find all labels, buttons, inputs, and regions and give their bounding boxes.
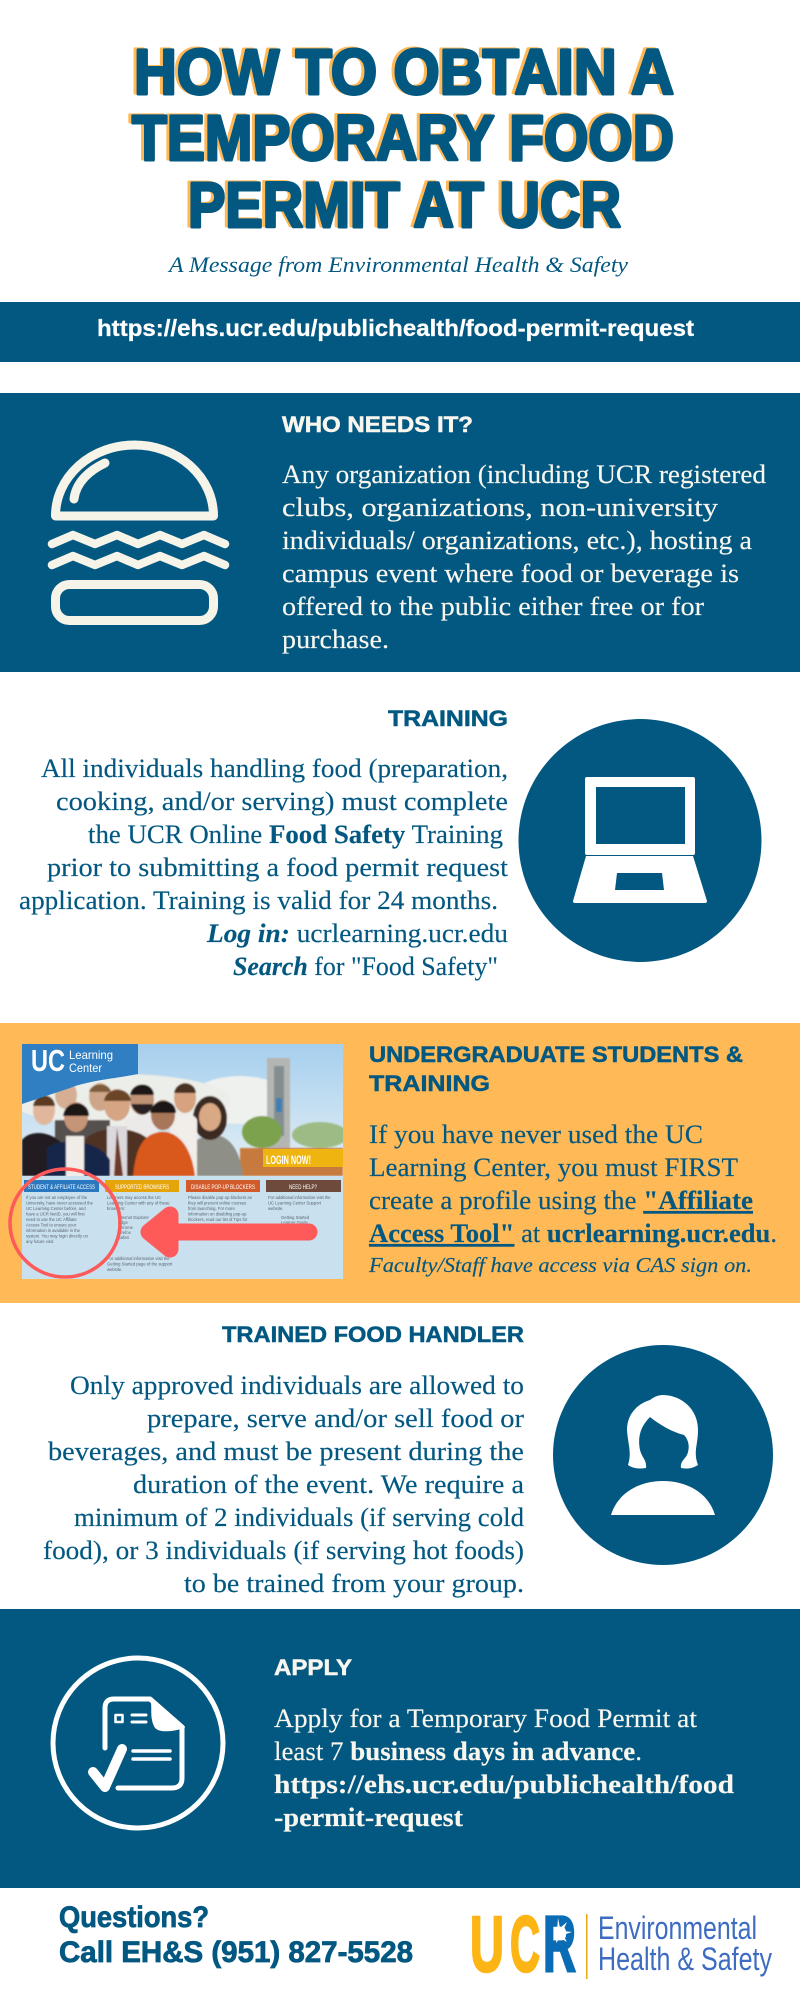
logo: UCR Environmental Health & Safety <box>470 1899 772 1988</box>
logo: UCR Environmental Health & Safety: U <box>470 1899 504 1988</box>
text block: beverages, and must be present during the <box>48 1437 524 1466</box>
screenshot: UC Learning Center: information on disabling pop-up <box>188 1212 247 1216</box>
title: PERMIT AT UCR <box>185 168 618 240</box>
screenshot: UC Learning Center: Center <box>69 1061 102 1075</box>
screenshot: UC Learning Center: University, have never accessed the <box>26 1200 94 1206</box>
screenshot: UC Learning Center: UC Learning Center before, and <box>26 1206 86 1211</box>
title <box>129 35 674 241</box>
screenshot: UC Learning Center: website. <box>107 1267 122 1272</box>
text block: purchase. <box>282 625 389 654</box>
panel: undergraduate students <box>0 1023 800 1303</box>
screenshot: UC Learning Center: any future visit. <box>26 1239 54 1244</box>
screenshot: UC Learning Center: blockers, read our list of Tips for <box>188 1217 248 1222</box>
text block: the UCR Online Food Safety Training <box>88 820 503 849</box>
screenshot: UC Learning Center: LOGIN NOW! <box>266 1153 311 1167</box>
screenshot: UC Learning Center: Access Tool to ensure your <box>26 1222 77 1228</box>
panel: who needs it <box>0 393 800 672</box>
screenshot: UC Learning Center: UC <box>31 1043 65 1078</box>
screenshot: UC Learning Center: SUPPORTED BROWSERS <box>115 1185 169 1191</box>
text block: application. Training is valid for 24 months. <box>19 886 498 915</box>
footer contact text: Questions? <box>59 1901 209 1934</box>
icon: burger <box>52 445 225 620</box>
screenshot: UC Learning Center: NEED HELP? <box>289 1185 317 1191</box>
screenshot: UC Learning Center: Internet Explorer <box>118 1215 150 1220</box>
icon: person <box>553 1345 773 1565</box>
logo: UCR Environmental Health & Safety: Environmental <box>598 1910 757 1946</box>
text block: All individuals handling food (preparation, <box>41 754 508 783</box>
text block: https://ehs.ucr.edu/publichealth/food <box>274 1770 735 1799</box>
screenshot: UC Learning Center: browsers: <box>107 1206 125 1211</box>
title: HOW TO OBTAIN A <box>134 36 674 108</box>
screenshot: UC Learning Center: Learners may access the UC <box>107 1195 161 1200</box>
heading: TRAINED FOOD HANDLER <box>222 1322 524 1347</box>
text block: prepare, serve and/or sell food or <box>147 1404 524 1433</box>
panel: apply <box>0 1609 800 1888</box>
screenshot: UC Learning Center: If you are not an employee of the <box>26 1195 88 1200</box>
screenshot: UC Learning Center: DISABLE POP-UP BLOCKERS <box>191 1185 255 1191</box>
text block <box>274 1704 735 1832</box>
text block <box>43 1371 524 1598</box>
screenshot: UC Learning Center: UC Learning Center Support <box>268 1200 322 1206</box>
text block: Faculty/Staff have access via CAS sign on. <box>368 1253 752 1277</box>
text block: Log in: ucrlearning.ucr.edu <box>206 919 508 948</box>
heading: WHO NEEDS IT? <box>282 412 473 437</box>
icon: laptop <box>518 719 762 962</box>
screenshot: UC Learning Center: Please disable pop-up blockers as <box>188 1195 252 1200</box>
text block: Only approved individuals are allowed to <box>70 1371 524 1400</box>
text block: cooking, and/or serving) must complete <box>56 787 508 816</box>
text block <box>282 460 766 654</box>
screenshot: UC Learning Center: Getting Started page of the support <box>107 1262 173 1266</box>
text block: Apply for a Temporary Food Permit at <box>274 1704 698 1733</box>
screenshot: UC Learning Center: For additional information visit the <box>107 1256 170 1261</box>
screenshot: UC Learning Center: Getting Started <box>281 1215 310 1220</box>
text block: Any organization (including UCR registered <box>282 460 766 489</box>
text block: least 7 business days in advance . <box>274 1737 642 1766</box>
screenshot: UC Learning Center: from launching. For more <box>188 1206 235 1211</box>
text block: campus event where food or beverage is <box>282 559 739 588</box>
heading: APPLY <box>274 1655 352 1680</box>
screenshot: UC Learning Center: they will prevent online courses <box>188 1200 246 1206</box>
text block: food), or 3 individuals (if serving hot foods) <box>43 1536 524 1565</box>
screenshot: UC Learning Center: Learner Guide <box>281 1220 308 1225</box>
text block: create a profile using the "Affiliate <box>369 1186 753 1215</box>
screenshot: UC Learning Center <box>10 1043 348 1279</box>
title: TEMPORARY FOOD <box>129 101 671 173</box>
heading: UNDERGRADUATE STUDENTS & <box>369 1042 743 1067</box>
text block <box>19 754 509 981</box>
text block: to be trained from your group. <box>184 1569 524 1598</box>
title: TEMPORARY FOOD <box>132 102 674 174</box>
footer contact text <box>59 1901 413 1969</box>
text block: Access Tool" at ucrlearning.ucr.edu. <box>369 1219 777 1248</box>
screenshot: UC Learning Center: Edge <box>118 1220 128 1225</box>
screenshot: UC Learning Center: website. <box>268 1206 283 1211</box>
icon: document with checkmark <box>53 1658 223 1828</box>
screenshot: UC Learning Center: Learning Center with any of these <box>107 1200 170 1206</box>
text block: minimum of 2 individuals (if serving cold <box>74 1503 524 1532</box>
heading <box>369 1042 743 1096</box>
footer contact text: Call EH&S (951) 827-5528 <box>59 1936 413 1969</box>
url banner <box>0 302 800 362</box>
text block: offered to the public either free or for <box>282 592 704 621</box>
heading: TRAINING <box>388 706 508 731</box>
text block: Search for "Food Safety" <box>233 952 498 981</box>
screenshot: UC Learning Center: Learning <box>69 1048 113 1062</box>
screenshot: UC Learning Center: system. You may login directly on <box>26 1234 89 1238</box>
arrow <box>149 1215 309 1249</box>
subtitle: A Message from Environmental Health & Safety <box>167 252 628 277</box>
text block: duration of the event. We require a <box>133 1470 524 1499</box>
screenshot: UC Learning Center: Safari <box>118 1235 129 1240</box>
url banner: https://ehs.ucr.edu/publichealth/food-permit-request <box>97 315 694 341</box>
screenshot: UC Learning Center: information is available in the <box>26 1228 81 1233</box>
text block: -permit-request <box>274 1803 463 1832</box>
callout circle <box>10 1169 120 1277</box>
text block: Learning Center, you must FIRST <box>369 1153 738 1182</box>
text block: prior to submitting a food permit request <box>47 853 509 882</box>
screenshot: UC Learning Center: Firefox <box>118 1230 132 1235</box>
text block: If you have never used the UC <box>369 1120 703 1149</box>
text block: individuals/ organizations, etc.), hosting a <box>282 526 752 555</box>
text block <box>368 1120 777 1277</box>
screenshot: UC Learning Center: need to use the UC Affiliate <box>26 1217 77 1222</box>
screenshot: UC Learning Center: have a UCR NetID, you will first <box>26 1212 85 1216</box>
panel: trained food handler <box>43 1322 773 1598</box>
screenshot: UC Learning Center: STUDENT & AFFILIATE ACCESS <box>28 1185 95 1191</box>
screenshot: UC Learning Center: For additional information visit the <box>268 1195 331 1200</box>
title: HOW TO OBTAIN A <box>131 35 671 107</box>
text block: clubs, organizations, non-university <box>282 493 718 522</box>
panel: training <box>19 706 762 981</box>
logo: UCR Environmental Health & Safety: R <box>543 1899 576 1988</box>
screenshot: UC Learning Center: Chrome <box>118 1225 134 1230</box>
logo: UCR Environmental Health & Safety: C <box>510 1899 540 1988</box>
heading: TRAINING <box>369 1071 490 1096</box>
title: PERMIT AT UCR <box>188 169 621 241</box>
